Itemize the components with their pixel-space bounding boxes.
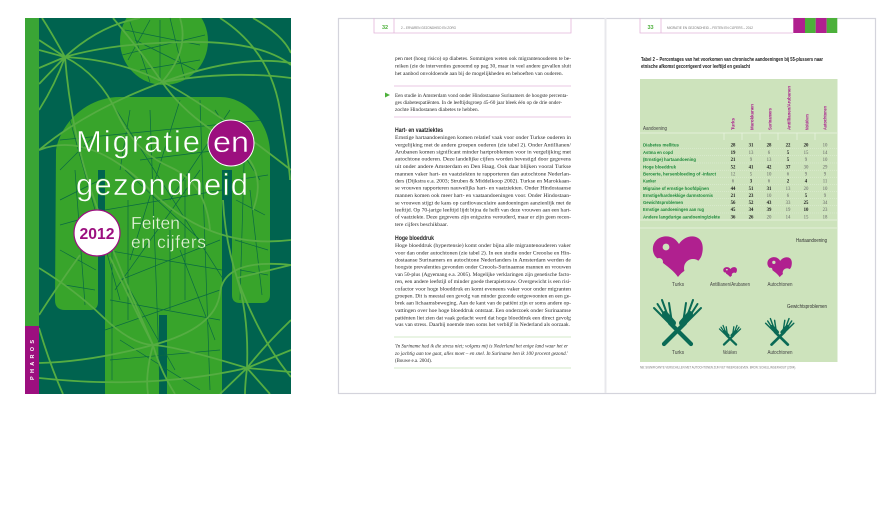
paragraph: blood pressure: brek aan lichaamsbeweging. Aan de kant van de patiënt zijn er soms andere op- (395, 301, 571, 307)
heading: blood pressure: Hoge bloeddruk (395, 236, 435, 242)
values: 56 (731, 201, 736, 206)
paragraph: heart disease: of vaatziekte. Deze gegevens zijn enigszins verouderd, maar er zijn geen recen- (395, 214, 571, 221)
cover spine band (25, 18, 39, 326)
heart labels: Antillianen/Arubanen (710, 282, 750, 288)
icon: forks Autochtonen (766, 319, 794, 345)
paragraph: heart disease: vergelijking met de andere groepen ouderen (zie tabel 2). Onder Antillianen/ (395, 141, 571, 148)
values: 5 (805, 194, 808, 199)
values (731, 144, 828, 220)
purple PHAROS band (25, 326, 39, 394)
paragraph: heart disease: se vrouwen stijgt de kans op cardiovasculaire aandoeningen aanzienlijk met de (395, 200, 571, 206)
table header: Marokkanen (750, 104, 754, 130)
fork labels (672, 350, 793, 356)
callout: zochte Hindostanen diabetes te hebben. (395, 107, 480, 113)
quote (394, 337, 571, 368)
paragraph: heart disease: se vrouwen rapporteren nauwelijks hart- en vaatziekten. Onder Hindostaanse (395, 186, 571, 192)
map lines on figure (60, 18, 268, 390)
values: 36 (731, 216, 736, 220)
paragraph: heart disease: autochtone ouderen. Deze landelijke cijfers worden bevestigd door gegevens (395, 156, 572, 163)
row labels: Migraine of ernstige hoofdpijnen (643, 186, 709, 191)
values: 2 (787, 180, 790, 184)
table header (643, 86, 828, 132)
paragraph: blood pressure: patiënten liet zien dat vaak gedacht werd dat hoge bloeddruk een direct gevolg (395, 315, 571, 321)
paragraph: heart disease: uit onder andere Amsterdam en Den Haag. Ook daar blijken vooral Turkse (395, 164, 571, 170)
paragraph: heart disease: mannen komen ook meer hart- en vaataandoeningen voor. Onder Hindostaan- (395, 193, 571, 199)
intro paragraph: het aanbod onvoldoende aan bij de mogelijkheden en behoeften van ouderen. (395, 70, 564, 77)
publisher name: PHAROS (30, 340, 36, 380)
callout: Een studie in Amsterdam vond onder Hindostaanse Surinamers de hoogste percenta- (395, 93, 568, 99)
heart labels (672, 282, 793, 288)
year badge (74, 210, 120, 256)
quote: zo jachtig aan toe gaat, alles moet – en snel. In Suriname ben ik 100 procent gezond.' (394, 351, 569, 357)
row labels: Kanker (643, 178, 656, 184)
values: 3 (750, 180, 753, 184)
book cover (25, 0, 291, 394)
icon: heart Autochtonen (767, 257, 792, 277)
values: 20 (767, 216, 772, 220)
values: 9 (805, 158, 808, 163)
footnote: NB: SIGNIFICANTE VERSCHILLEN MET AUTOCHTONEN ZIJN VET WEERGEGEVEN. BRON: SCHELLINGERHOUT (2004). (640, 366, 796, 370)
paragraph: blood pressure: dostaanse Surinamers en autochtone Nederlanders in Amsterdam werden de (395, 257, 571, 263)
paragraph: heart disease: tere cijfers beschikbaar. (395, 221, 449, 228)
paragraph: heart disease: ders (Dijkstra e.a. 2003; Struben & Middelkoop 2002). Turkse en Marokkaan- (395, 178, 571, 185)
paragraph: blood pressure: vattingen over hoe hoge bloeddruk ontstaat. Een onderzoek onder Surinaamse (395, 308, 571, 314)
paragraph: blood pressure (395, 242, 571, 328)
row labels: (Ernstige) hartaandoening (643, 157, 696, 162)
values: 6 (768, 180, 771, 184)
heart labels: Turks (672, 282, 685, 288)
values: 52 (749, 201, 754, 206)
values: 10 (767, 172, 772, 178)
values: 14 (823, 151, 828, 156)
intro paragraph: pen met (hoog risico) op diabetes. Sommigen weten ook migrantenouderen te be- (395, 55, 571, 62)
values: 10 (823, 158, 828, 163)
values: 13 (749, 151, 754, 156)
chart heading: heart disease: Hartaandoening (796, 238, 827, 244)
chart heading: weight problems: Gewichtsproblemen (787, 304, 827, 310)
row labels: Andere langdurige aandoening/ziekte (643, 214, 720, 220)
row labels: Beroerte, hersenbloeding of -infarct (643, 172, 716, 176)
table header: Turks (730, 117, 736, 130)
values: 33 (786, 201, 791, 206)
values: 22 (786, 144, 791, 148)
colour tabs (793, 18, 837, 33)
values: 26 (749, 216, 754, 220)
values: 9 (750, 158, 753, 163)
values: 13 (786, 187, 791, 192)
table header: Autochtonen (822, 106, 828, 130)
table rules (640, 133, 837, 228)
values: 42 (767, 166, 772, 170)
values: 21 (731, 158, 736, 163)
values: 9 (824, 194, 827, 199)
quote: 'In Suriname had ik die stress niet; volgens mij is Nederland het enige land waar het er (395, 344, 569, 350)
green data panel (640, 79, 838, 362)
values: 30 (804, 166, 809, 170)
right page header (640, 18, 837, 33)
values: 9 (824, 172, 827, 178)
row labels: Ernstige aandoeningen aan rug (643, 207, 704, 212)
paragraph: blood pressure: voor dan onder autochtonen (zie tabel 2). In een studie onder Creoolse en Hin- (395, 249, 571, 256)
paragraph: blood pressure: was van stress. Daarbij noemde men soms het verblijf in Nederland als oorzaak. (395, 321, 571, 328)
paragraph: heart disease: Arubanen komen significant minder hartproblemen voor in vergelijking met (395, 149, 571, 156)
paragraph: heart disease: leeftijd. Op 70-jarige leeftijd lijdt bijna de helft van deze vrouwen aan een hart- (395, 207, 571, 214)
title line one: Migratie (76, 124, 200, 159)
paragraph: blood pressure: groepen. Dit is meestal een gevolg van minder gezonde eetgewoonten en een ge- (395, 294, 571, 300)
values: 37 (786, 166, 791, 170)
network arcs (39, 18, 291, 394)
icon: forks Molukkers (719, 325, 741, 345)
values: 51 (749, 187, 754, 192)
icon: forks Turks (654, 300, 701, 344)
values: 29 (823, 166, 828, 170)
values: 34 (749, 208, 754, 213)
values: 6 (732, 180, 735, 184)
values: 10 (767, 194, 772, 199)
values: 5 (750, 172, 753, 178)
values: 12 (731, 172, 736, 178)
values: 41 (749, 166, 754, 170)
values: 15 (804, 151, 809, 156)
icon: green arrow (385, 92, 390, 98)
table header: Antillianen/Arubanen (786, 86, 792, 130)
values: 44 (731, 187, 736, 192)
callout: ges diabetespatiënten. In de leeftijdsgroep 45-60 jaar bleek één op de drie onder- (395, 99, 562, 106)
values: 5 (787, 151, 790, 156)
values: 28 (767, 144, 772, 148)
fork labels: Turks (672, 350, 685, 356)
icon: heart Turks (653, 236, 703, 277)
paragraph: blood pressure: hoogste prevalenties gevonden onder Creools-Surinaamse mannen en vrouwen (395, 265, 571, 271)
paragraph: heart disease (395, 134, 572, 228)
subtitle: en cijfers (131, 232, 206, 252)
right page header: MIGRATIE EN GEZONDHEID – FEITEN EN CIJFERS – 2012 (667, 26, 753, 30)
values: 34 (823, 201, 828, 206)
heading: heart disease: Hart- en vaatziektes (395, 128, 444, 134)
year badge: 2012 (80, 226, 115, 243)
table header: Molukkers (804, 113, 810, 130)
values: 14 (786, 216, 791, 220)
values: 19 (786, 208, 791, 213)
subtitle (131, 213, 206, 252)
values: 28 (731, 144, 736, 148)
table title: Tabel 2 – Percentages van het voorkomen van chronische aandoeningen bij 55-plussers naar (641, 57, 823, 63)
intro paragraph (395, 55, 571, 77)
values: 52 (731, 166, 736, 170)
values: 6 (768, 151, 771, 156)
heart labels: Autochtonen (768, 282, 793, 288)
values: 23 (749, 194, 754, 199)
book spread outline (338, 18, 876, 394)
callout (385, 86, 571, 117)
icon: heart Antillianen (723, 267, 737, 277)
quote: (Bouwe e.a. 2004). (395, 357, 432, 364)
row labels: Hoge bloeddruk (643, 164, 676, 170)
left page header: 32 (382, 25, 388, 31)
paragraph: heart disease: mannen vaker hart- en vaatziekten te rapporteren dan autochtone Nederlan- (395, 171, 571, 177)
left page header (374, 18, 571, 33)
paragraph: blood pressure: van 50-plus (Agyemang e.a. 2005). Mogelijke verklaringen zijn genetische facto- (395, 271, 571, 278)
values: 20 (804, 187, 809, 192)
values: 11 (823, 180, 828, 184)
right page header: 33 (647, 25, 654, 31)
paragraph: blood pressure: ren, een andere leefstijl of minder goede therapietrouw. Overgewicht is een risi- (395, 278, 571, 285)
left page header: 2 – ERVAREN GEZONDHEID EN ZORG (401, 26, 456, 30)
title line two: gezondheid (76, 167, 248, 202)
values: 9 (805, 172, 808, 178)
row labels: Ernstige/hardnekkige darmstoornis (643, 193, 713, 198)
en badge (208, 120, 254, 166)
values: 6 (787, 172, 790, 178)
en badge: en (213, 126, 249, 159)
paragraph: blood pressure: cofactor voor hoge bloeddruk en komt eveneens vaker voor onder migranten (395, 285, 571, 292)
values: 10 (823, 187, 828, 192)
paragraph: heart disease: Ernstige hartaandoeningen komen relatief vaak voor onder Turkse ouderen in (395, 134, 571, 141)
values: 10 (823, 144, 828, 148)
intro paragraph: reiken (zie de interventies genoemd op pag 30, maar in veel andere gevallen sluit (395, 62, 571, 70)
values: 19 (731, 151, 736, 156)
table header: Aandoening (643, 126, 667, 132)
values: 13 (767, 158, 772, 163)
table title: etnische afkomst gecorrigeerd voor leeftijd en geslacht (641, 64, 750, 70)
table rows (643, 142, 828, 220)
values: 20 (804, 144, 809, 148)
values: 10 (804, 208, 809, 213)
values: 25 (804, 201, 809, 206)
values: 21 (731, 194, 736, 199)
values: 31 (767, 187, 772, 192)
fork labels: Molukkers (723, 350, 737, 356)
row labels: Astma en copd (643, 150, 673, 155)
figure silhouette (55, 0, 270, 394)
values: 45 (731, 208, 736, 213)
values: 31 (749, 144, 754, 148)
values: 43 (767, 201, 772, 206)
values: 39 (767, 208, 772, 213)
subtitle: Feiten (131, 213, 180, 233)
values: 18 (823, 216, 828, 220)
table header: Surinamers (768, 107, 772, 130)
table title (641, 57, 823, 70)
fork labels: Autochtonen (768, 350, 793, 356)
values: 6 (787, 194, 790, 199)
values: 5 (787, 158, 790, 163)
row labels (643, 142, 720, 220)
values: 23 (823, 208, 828, 213)
row labels: Diabetes mellitus (643, 142, 679, 148)
paragraph: blood pressure: Hoge bloeddruk (hypertensie) komt onder bijna alle migrantenouderen vaker (395, 242, 571, 249)
row labels: Gewichtsproblemen (643, 200, 683, 205)
values: 15 (804, 216, 809, 220)
values: 4 (805, 180, 808, 184)
